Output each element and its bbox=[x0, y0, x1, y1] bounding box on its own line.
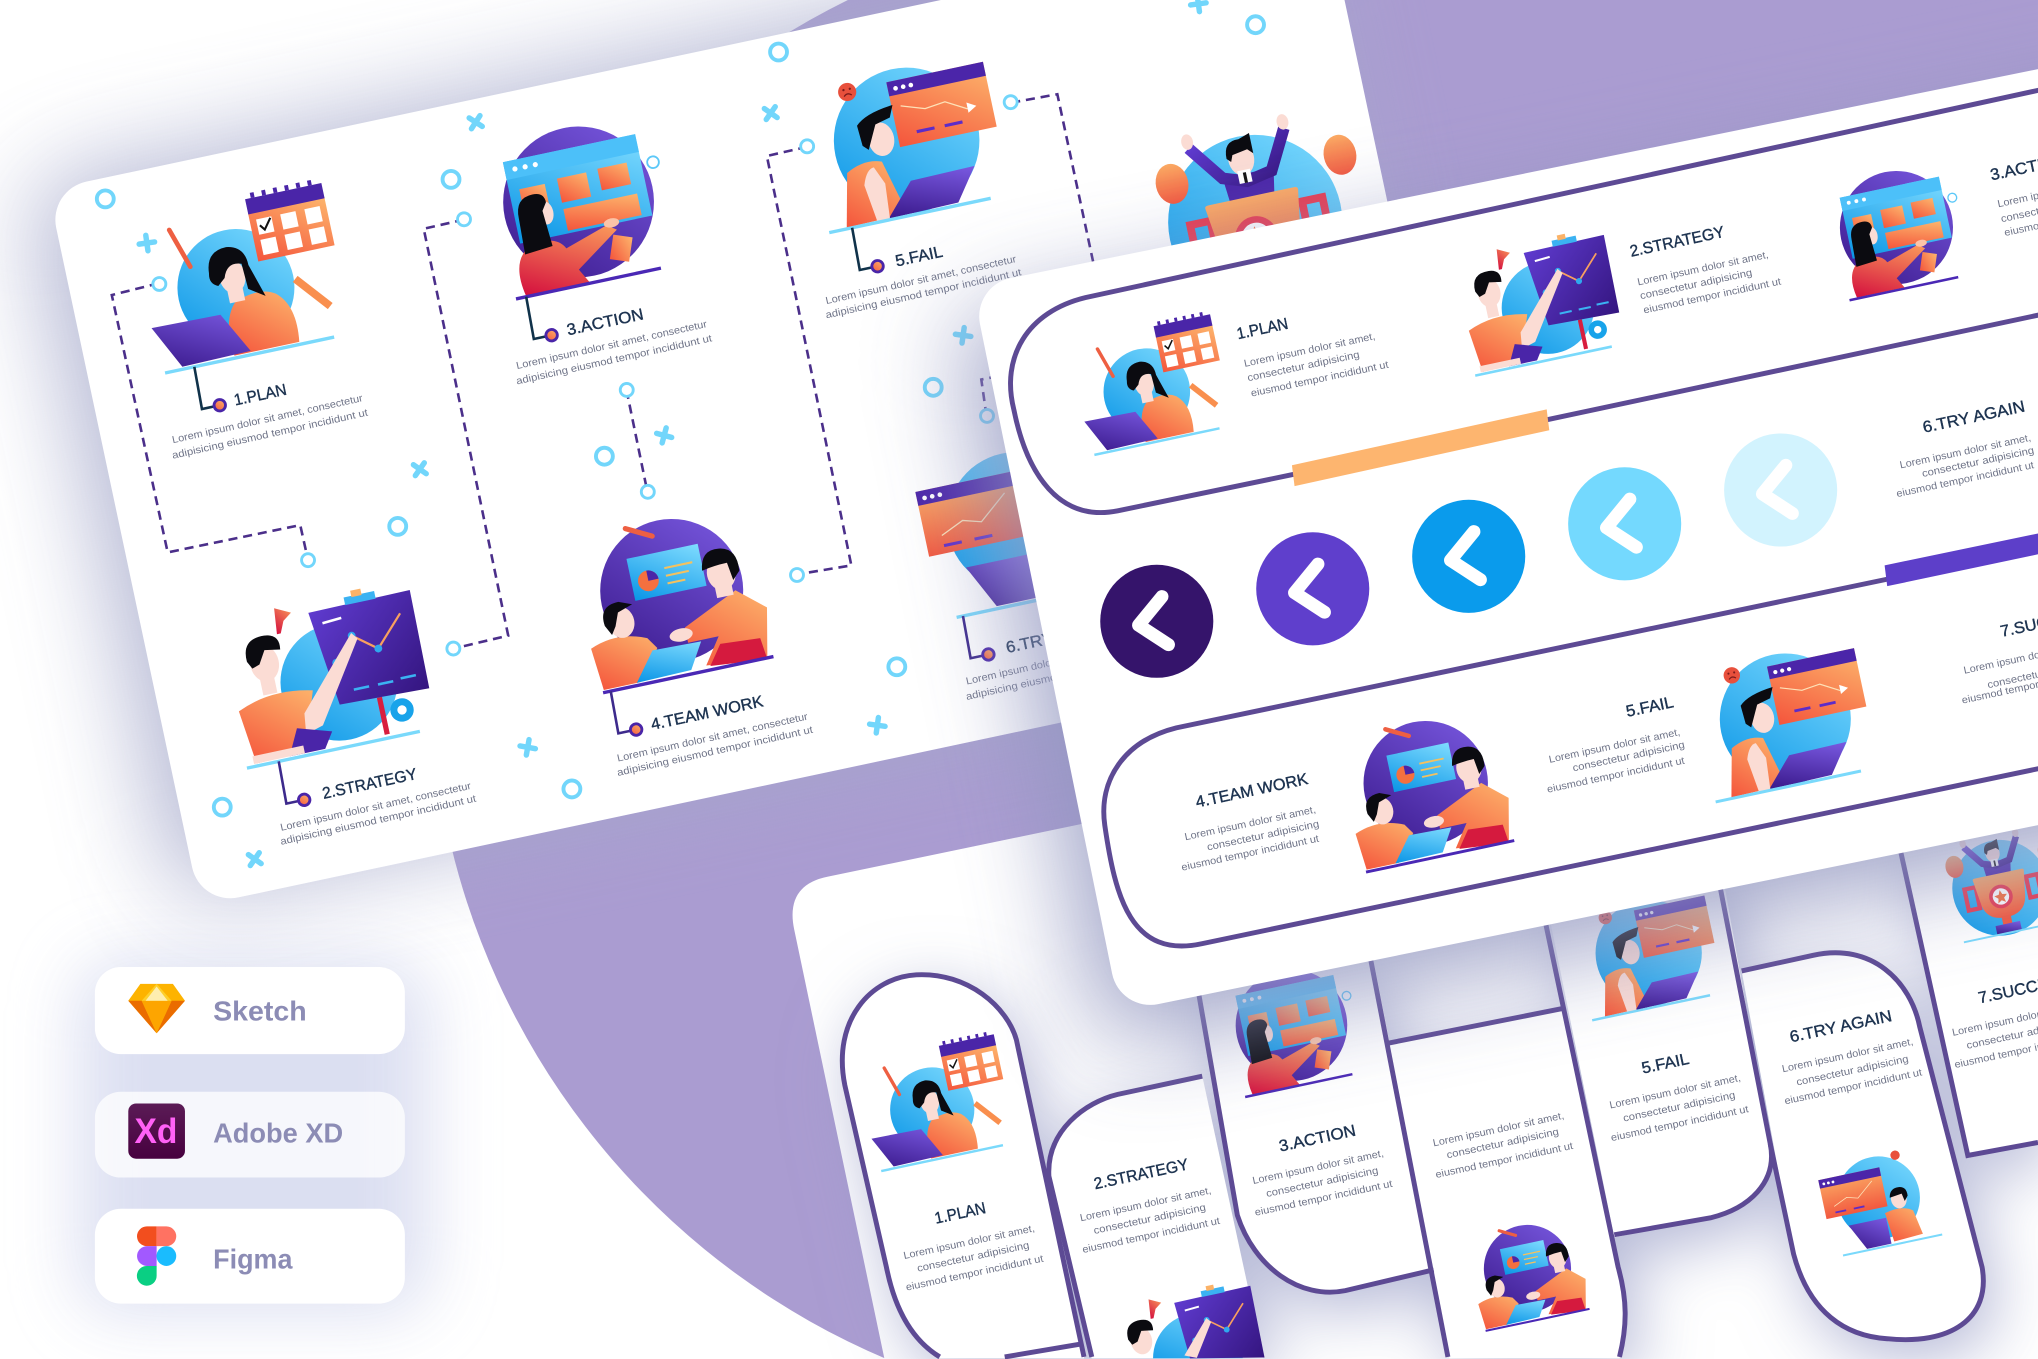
text: 5.FAIL: Lorem ipsum dolor sit amet, bbox=[1548, 727, 1681, 766]
text: 3.ACTION bbox=[1989, 150, 2038, 239]
step: 3.ACTION: Lorem ipsum dolor sit amet, consectetur bbox=[515, 319, 709, 372]
step: 3.ACTION: adipisicing eiusmod tempor incididunt ut bbox=[515, 333, 713, 387]
text: 3.ACTION: 3.ACTION bbox=[1277, 1122, 1357, 1155]
text: 6.TRY AGAIN: consectetur adipisicing bbox=[1921, 445, 2035, 480]
text: 6.TRY AGAIN: Lorem ipsum dolor sit amet, bbox=[1781, 1037, 1914, 1075]
illustration: plan bbox=[855, 1031, 1017, 1172]
step: 5.FAIL: adipisicing eiusmod tempor incididunt ut bbox=[825, 267, 1023, 321]
text: 6.TRY AGAIN: consectetur adipisicing bbox=[1795, 1054, 1910, 1088]
text: 4.TEAM WORK: 4.TEAM WORK bbox=[1194, 770, 1310, 811]
badge: Adobe XD: Adobe XD bbox=[213, 1117, 343, 1148]
text: 1.PLAN: Lorem ipsum dolor sit amet, bbox=[903, 1223, 1036, 1262]
step: 3.ACTION bbox=[483, 110, 713, 387]
step: 6.TRY AGAIN: Lorem ipsum dolor sit amet, consectetur bbox=[965, 634, 1158, 687]
illustration: action bbox=[1221, 957, 1367, 1097]
text: 1.PLAN: eiusmod tempor incididunt ut bbox=[905, 1254, 1045, 1294]
text: team work description: consectetur adipisicing bbox=[1446, 1127, 1560, 1161]
badge: Sketch bbox=[95, 967, 405, 1054]
soft backdrop behind badges bbox=[78, 962, 429, 1313]
pill outlines bbox=[842, 832, 2038, 1357]
step: 5.FAIL bbox=[799, 50, 1023, 321]
text: 4.TEAM WORK: consectetur adipisicing bbox=[1206, 819, 1320, 853]
icon: xd: Xd bbox=[135, 1112, 177, 1151]
text: 2.STRATEGY bbox=[1079, 1156, 1221, 1256]
step: 4.TEAM WORK: adipisicing eiusmod tempor incididunt ut bbox=[616, 725, 814, 779]
text: 2.STRATEGY: Lorem ipsum dolor sit amet, bbox=[1636, 250, 1770, 288]
upper pill outline bbox=[1011, 88, 2038, 513]
step: 4.TEAM WORK: Lorem ipsum dolor sit amet, consectetur bbox=[616, 711, 810, 765]
text: 2.STRATEGY: 2.STRATEGY bbox=[1092, 1156, 1190, 1193]
text: 1.PLAN bbox=[1235, 315, 1390, 400]
icon: sketch diamond bbox=[128, 984, 185, 1033]
illustration: success bbox=[1941, 821, 2038, 945]
text: 2.STRATEGY: Lorem ipsum dolor sit amet, bbox=[1079, 1186, 1212, 1224]
illustration: fail bbox=[1570, 887, 1725, 1020]
illustration: strategy bbox=[1121, 1277, 1265, 1359]
illustration: fail bbox=[1688, 638, 1879, 802]
text: 3.ACTION: consectetur adipisicing bbox=[1265, 1165, 1379, 1200]
step: 1.PLAN: 1.PLAN bbox=[232, 381, 288, 409]
text: 4.TEAM WORK bbox=[1180, 770, 1320, 874]
text: team work description: eiusmod tempor incididunt ut bbox=[1435, 1141, 1574, 1181]
step: 6.TRY AGAIN: adipisicing eiusmod tempor incididunt ut bbox=[965, 649, 1163, 703]
text: 5.FAIL: eiusmod tempor incididunt ut bbox=[1546, 756, 1686, 796]
illustration: team work bbox=[1335, 706, 1518, 874]
dashed connectors bbox=[112, 94, 1098, 655]
panel: chevron process bbox=[972, 27, 2038, 1012]
text: 6.TRY AGAIN bbox=[1895, 397, 2035, 500]
text: 1.PLAN: consectetur adipisicing bbox=[916, 1240, 1030, 1275]
icon: xd bbox=[128, 1103, 185, 1159]
purple circle backdrop bbox=[430, 0, 1925, 1359]
text: 6.TRY AGAIN bbox=[1781, 1007, 1923, 1107]
text: 1.PLAN: eiusmod tempor incididunt ut bbox=[1250, 360, 1390, 400]
illustration: strategy bbox=[1450, 226, 1627, 376]
text: 4.TEAM WORK: eiusmod tempor incididunt ut bbox=[1180, 834, 1320, 874]
text: team work description bbox=[1432, 1111, 1574, 1181]
text: 5.FAIL: 5.FAIL bbox=[1624, 693, 1675, 721]
text: 1.PLAN: consectetur adipisicing bbox=[1246, 350, 1361, 384]
step: 2.STRATEGY: 2.STRATEGY bbox=[321, 765, 419, 803]
lower pill outline bbox=[1104, 578, 2038, 946]
step: 2.STRATEGY bbox=[215, 579, 477, 848]
text: 1.PLAN: Lorem ipsum dolor sit amet, bbox=[1243, 331, 1376, 370]
step: 4.TEAM WORK bbox=[568, 502, 814, 779]
badge: Figma bbox=[95, 1209, 405, 1304]
text: 7.SUCCESS bbox=[1961, 604, 2038, 707]
purple corner block top right bbox=[1339, 0, 2038, 214]
text: 6.TRY AGAIN: eiusmod tempor incididunt ut bbox=[1784, 1067, 1923, 1107]
text: 5.FAIL: 5.FAIL bbox=[1640, 1050, 1691, 1077]
text: 3.ACTION bbox=[1252, 1122, 1394, 1219]
step: 7.SUCCESS illustration bbox=[1147, 101, 1384, 326]
text: 6.TRY AGAIN: 6.TRY AGAIN bbox=[1921, 397, 2027, 437]
panel: dashed timeline bbox=[48, 0, 1479, 906]
illustration: team work bbox=[1464, 1215, 1592, 1332]
text: team work description: Lorem ipsum dolor sit amet, bbox=[1432, 1111, 1565, 1149]
step: 2.STRATEGY: adipisicing eiusmod tempor incididunt ut bbox=[279, 794, 477, 848]
text: 2.STRATEGY: 2.STRATEGY bbox=[1628, 223, 1726, 261]
badge: Adobe XD bbox=[95, 1092, 405, 1178]
text: 2.STRATEGY: eiusmod tempor incididunt ut bbox=[1643, 276, 1782, 316]
step: 6.TRY AGAIN: 6.TRY AGAIN bbox=[1004, 618, 1110, 657]
purple bar bbox=[1885, 532, 2038, 586]
text: 2.STRATEGY: consectetur adipisicing bbox=[1093, 1202, 1207, 1237]
text: 2.STRATEGY: consectetur adipisicing bbox=[1639, 268, 1753, 302]
step: 1.PLAN: Lorem ipsum dolor sit amet, consectetur bbox=[171, 393, 365, 446]
text: 5.FAIL: eiusmod tempor incididunt ut bbox=[1610, 1104, 1750, 1144]
text: 2.STRATEGY: eiusmod tempor incididunt ut bbox=[1081, 1216, 1221, 1256]
text: 4.TEAM WORK: Lorem ipsum dolor sit amet, bbox=[1184, 805, 1317, 843]
decorative rings and crosses bbox=[97, 0, 1264, 870]
step: 6.TRY AGAIN bbox=[911, 432, 1163, 703]
text: 6.TRY AGAIN: Lorem ipsum dolor sit amet, bbox=[1899, 433, 2032, 471]
badge: Figma: Figma bbox=[213, 1244, 293, 1275]
orange bar bbox=[1292, 409, 1549, 486]
text: 1.PLAN: 1.PLAN bbox=[933, 1199, 988, 1228]
step: 4.TEAM WORK: 4.TEAM WORK bbox=[649, 692, 765, 734]
text: 6.TRY AGAIN: 6.TRY AGAIN bbox=[1788, 1007, 1894, 1046]
text: 1.PLAN: 1.PLAN bbox=[1235, 315, 1290, 343]
chevron circles bbox=[1100, 433, 1837, 678]
text: 7.SUCCESS bbox=[1951, 970, 2038, 1071]
text: 5.FAIL bbox=[1609, 1050, 1750, 1144]
step: 5.FAIL: 5.FAIL bbox=[894, 243, 944, 270]
text: 5.FAIL: Lorem ipsum dolor sit amet, bbox=[1609, 1073, 1742, 1111]
step: 5.FAIL: Lorem ipsum dolor sit amet, consectetur bbox=[825, 254, 1018, 307]
panel shadow: timeline panel bbox=[26, 0, 1457, 902]
text: 5.FAIL bbox=[1546, 693, 1686, 796]
text: 6.TRY AGAIN: eiusmod tempor incididunt ut bbox=[1895, 460, 2035, 500]
text: 2.STRATEGY bbox=[1628, 223, 1782, 316]
panel: vertical pill layout bbox=[793, 625, 2038, 1359]
step: 1.PLAN bbox=[128, 178, 369, 462]
text: 3.ACTION: Lorem ipsum dolor sit amet, bbox=[1252, 1148, 1385, 1187]
panel shadow: chevron panel bbox=[956, 62, 2038, 1047]
text: 5.FAIL: consectetur adipisicing bbox=[1572, 740, 1686, 774]
icon: figma bbox=[137, 1226, 176, 1286]
text: 1.PLAN bbox=[903, 1199, 1045, 1294]
badge: Sketch: Sketch bbox=[213, 995, 307, 1026]
illustration: action bbox=[1825, 159, 1973, 300]
step: 3.ACTION: 3.ACTION bbox=[565, 305, 645, 339]
step: 2.STRATEGY: Lorem ipsum dolor sit amet, consectetur bbox=[279, 781, 473, 834]
illustration: plan bbox=[1067, 311, 1234, 456]
step: 1.PLAN: adipisicing eiusmod tempor incididunt ut bbox=[171, 408, 369, 462]
illustration: try again bbox=[1816, 1144, 1942, 1257]
text: 5.FAIL: consectetur adipisicing bbox=[1622, 1090, 1736, 1125]
text: 3.ACTION: eiusmod tempor incididunt ut bbox=[1254, 1179, 1394, 1219]
